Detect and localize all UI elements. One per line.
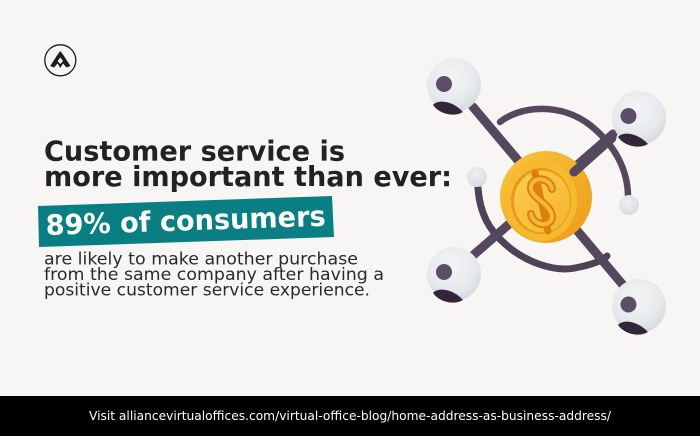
illustration: network with dollar coin (427, 58, 666, 335)
sphere bottom left (427, 247, 481, 303)
small node left (467, 167, 487, 187)
heading (44, 136, 452, 193)
sphere top right (612, 91, 666, 147)
body text: are likely to make another purchase (44, 250, 358, 270)
sphere bottom right (612, 279, 666, 335)
dollar sign (531, 173, 552, 231)
icon: logo (45, 45, 76, 76)
body text: positive customer service experience. (44, 280, 370, 300)
heading: more important than ever: (44, 161, 452, 193)
diagonal rods (470, 107, 623, 285)
rod over coin (574, 138, 612, 172)
sphere top left (427, 58, 481, 115)
body text (44, 250, 384, 300)
coin (500, 151, 592, 243)
body text: from the same company after having a (44, 265, 384, 285)
upper arc (500, 109, 628, 197)
footer bar: Visit alliancevirtualoffices.com/virtual-office-blog/home-address-as-business-address/ (89, 408, 612, 423)
lower arc (478, 188, 607, 269)
footer bar (0, 396, 700, 436)
small node right (619, 195, 639, 215)
heading: Customer service is (44, 136, 345, 168)
callout: 89% of consumers: 89% of consumers (45, 200, 326, 242)
